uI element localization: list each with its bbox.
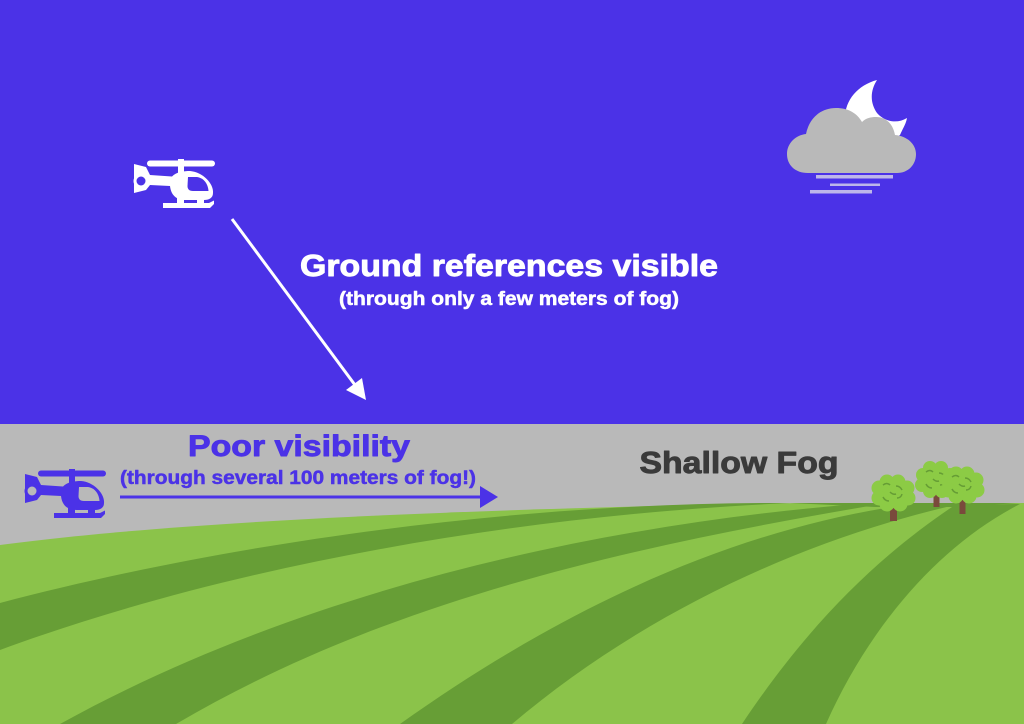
moon crescent — [845, 80, 907, 140]
tree middle — [915, 461, 957, 507]
icon: moon behind fog cloud — [787, 80, 916, 194]
tree left — [872, 474, 916, 521]
label: shallow fog: Shallow Fog — [640, 445, 838, 480]
night sky background — [0, 0, 1024, 424]
tree right — [940, 466, 984, 514]
green field — [0, 503, 1024, 724]
heading: ground references visible: Ground references visible — [300, 248, 718, 283]
subheading: through only a few meters of fog: (through only a few meters of fog) — [339, 289, 679, 310]
icon: trees on horizon — [872, 461, 984, 521]
arrow: view down through thin fog — [232, 219, 366, 400]
shallow fog band — [0, 424, 1024, 554]
icon: helicopter in clear air — [134, 159, 215, 208]
arrow: horizontal view through fog — [120, 486, 498, 508]
heading: poor visibility: Poor visibility — [188, 430, 410, 463]
subheading: through several 100 meters of fog: (through several 100 meters of fog!) — [120, 467, 476, 489]
fog lines — [810, 175, 893, 194]
icon: helicopter in fog — [24, 469, 106, 518]
cloud — [787, 108, 916, 173]
